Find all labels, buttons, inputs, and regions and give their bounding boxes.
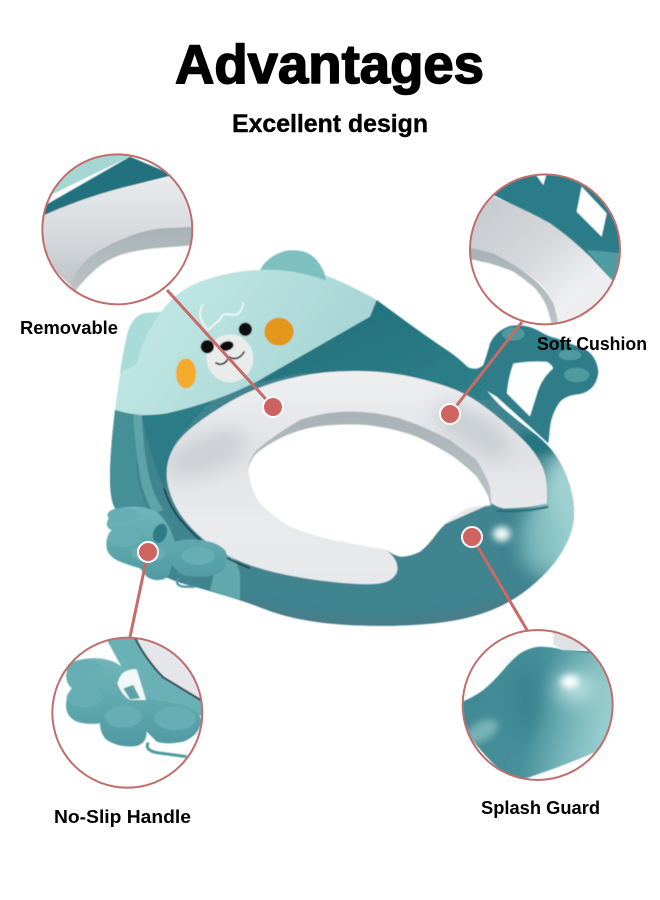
subtitle: Excellent design xyxy=(232,111,428,138)
label: removable: Removable xyxy=(20,318,118,338)
inner cushion slope xyxy=(248,412,492,507)
detail circle: removable xyxy=(33,147,197,304)
white cushion xyxy=(160,371,547,584)
detail circle: no-slip handle xyxy=(52,635,207,788)
splash guard highlight xyxy=(493,527,510,541)
cap side panel xyxy=(120,312,162,373)
dark seam below cushion xyxy=(164,488,250,568)
right rim highlight xyxy=(528,450,574,572)
back handle with paw grip xyxy=(467,325,598,443)
label: no-slip handle: No-Slip Handle xyxy=(54,807,191,827)
detail circle: splash guard xyxy=(458,628,617,780)
front left paw grip xyxy=(106,506,227,587)
title: Advantages xyxy=(175,33,484,95)
label: splash guard: Splash Guard xyxy=(481,798,600,818)
ear xyxy=(260,250,326,281)
seam under cushion end xyxy=(497,507,548,511)
panda face xyxy=(200,303,253,382)
detail circle: soft cushion xyxy=(467,173,627,325)
rear bracket xyxy=(210,548,240,600)
mint top cap xyxy=(115,269,377,415)
left side stripes xyxy=(110,411,145,508)
dark back wall xyxy=(257,300,493,400)
callout dots xyxy=(138,397,482,562)
connector lines xyxy=(130,290,527,637)
lower rim tone xyxy=(240,597,516,626)
orange cheeks xyxy=(176,318,294,388)
product: potty training seat xyxy=(106,250,598,640)
label: soft cushion: Soft Cushion xyxy=(537,334,647,354)
seat body xyxy=(110,300,595,640)
seat opening xyxy=(248,424,490,557)
